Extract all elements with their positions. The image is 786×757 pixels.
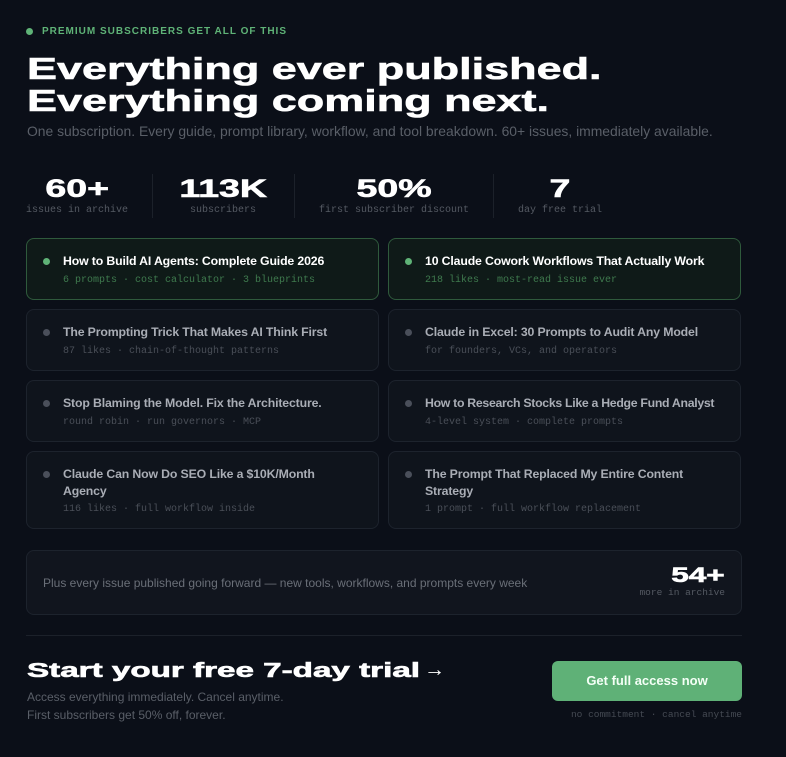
card: excel: [388, 309, 741, 371]
CTA text: Access everything immediately. Cancel anytime.: [27, 690, 284, 704]
card: architecture: Stop Blaming the Model. Fix the Architecture.: [63, 396, 322, 410]
card: content strategy: The Prompt That Replaced My Entire Content Strategy: [425, 467, 683, 498]
card: prompting trick: [26, 309, 379, 371]
card: content strategy: 1 prompt · full workflow replacement: [425, 504, 641, 515]
card: stocks: How to Research Stocks Like a Hedge Fund Analyst: [425, 396, 714, 410]
card: stocks: [388, 380, 741, 442]
stat: issues: issues in archive: [26, 205, 128, 216]
card: prompting trick: The Prompting Trick That Makes AI Think First: [63, 325, 327, 339]
title: Everything ever published.: [27, 51, 602, 86]
button: Get full access now: [586, 673, 708, 688]
stat: 54+: 54+: [672, 564, 725, 587]
stat: trial: day free trial: [518, 205, 602, 216]
CTA text: [27, 690, 284, 722]
card: SEO: Claude Can Now Do SEO Like a $10K/Month Agency: [63, 467, 315, 498]
stat: discount: [319, 175, 469, 216]
card: excel: for founders, VCs, and operators: [425, 346, 617, 357]
stat: discount: 50%: [356, 175, 432, 203]
card: AI agents: 6 prompts · cost calculator · 3 blueprints: [63, 275, 315, 286]
stat: subscribers: subscribers: [190, 205, 256, 216]
stat: subscribers: [179, 175, 268, 216]
card: prompting trick: 87 likes · chain-of-thought patterns: [63, 346, 279, 357]
card: architecture: [26, 380, 379, 442]
stat: trial: 7: [550, 175, 570, 203]
button note: no commitment · cancel anytime: [571, 709, 742, 720]
card: excel: Claude in Excel: 30 Prompts to Audit Any Model: [425, 325, 698, 339]
card: cowork: 218 likes · most-read issue ever: [425, 275, 617, 286]
subtitle: One subscription. Every guide, prompt library, workflow, and tool breakdown. 60+ issues, immediately available.: [27, 123, 713, 139]
card: SEO: 116 likes · full workflow inside: [63, 504, 255, 515]
stat: issues: [26, 175, 128, 216]
stat: trial: [518, 175, 602, 216]
CTA heading: Start your free 7-day trial: [27, 660, 420, 682]
stat: 54+: more in archive: [639, 587, 725, 598]
card: AI agents: [26, 238, 379, 300]
title: Everything coming next.: [27, 83, 549, 118]
card: cowork: [388, 238, 741, 300]
card: architecture: round robin · run governors · MCP: [63, 417, 261, 428]
title: [27, 51, 602, 118]
CTA heading: →: [424, 658, 445, 681]
button: [552, 661, 742, 701]
stat: subscribers: 113K: [179, 175, 267, 203]
card: stocks: 4-level system · complete prompts: [425, 417, 623, 428]
card: SEO: [26, 451, 379, 529]
stat: issues: 60+: [45, 175, 109, 203]
eyebrow label: PREMIUM SUBSCRIBERS GET ALL OF THIS: [42, 26, 287, 37]
card: AI agents: How to Build AI Agents: Complete Guide 2026: [63, 254, 324, 268]
card: cowork: 10 Claude Cowork Workflows That Actually Work: [425, 254, 704, 268]
stat: discount: first subscriber discount: [319, 205, 469, 216]
panel: future issues: [26, 550, 742, 615]
text: going forward: Plus every issue published going forward — new tools, workflows, and prompts every week: [43, 576, 527, 590]
CTA text: First subscribers get 50% off, forever.: [27, 708, 226, 722]
stat: 54+: [639, 564, 725, 598]
card: content strategy: [388, 451, 741, 529]
